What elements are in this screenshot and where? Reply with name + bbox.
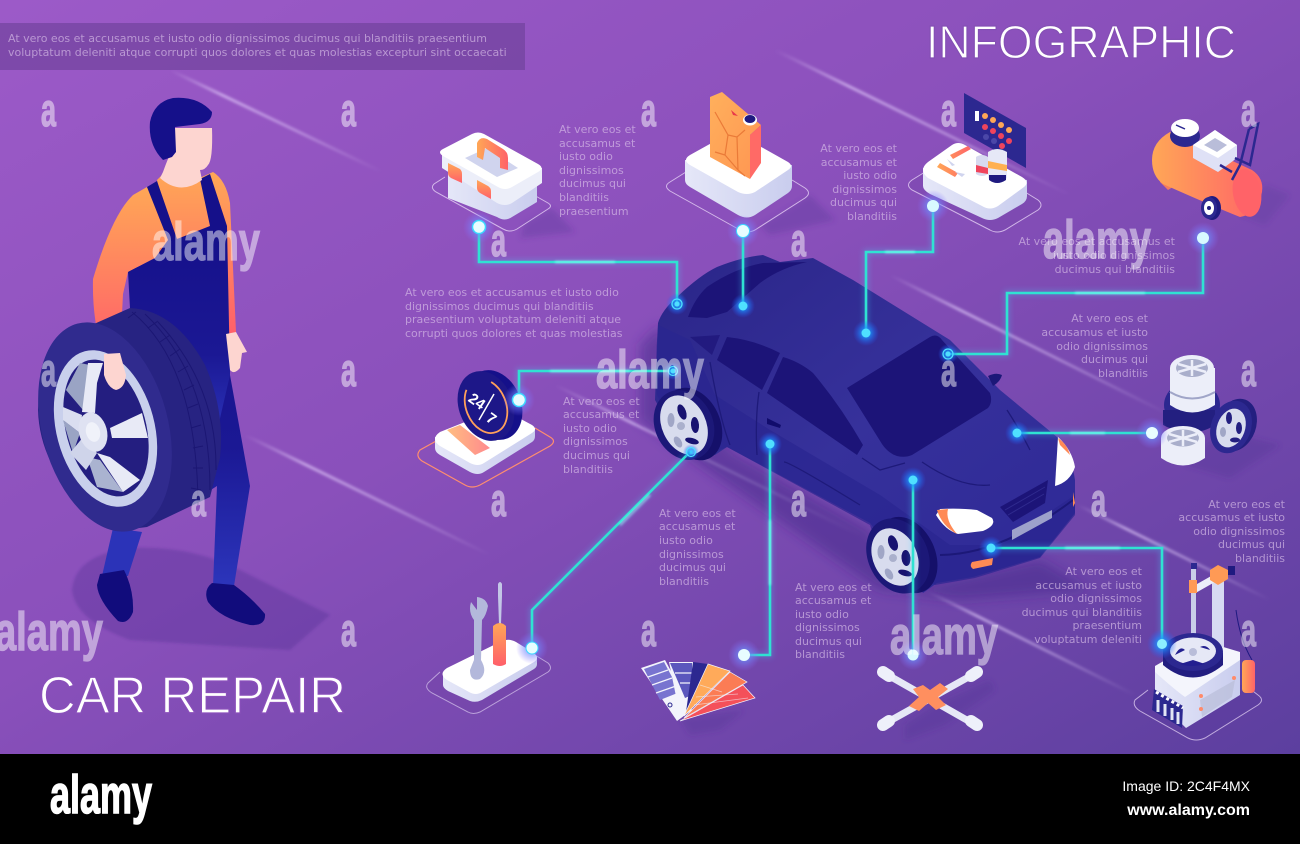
rear wheel [643, 378, 734, 470]
watermark overlay: a [1241, 604, 1256, 656]
cross wrench icon [883, 672, 995, 740]
left hand on tyre [104, 353, 126, 390]
overall straps [147, 174, 227, 300]
wheels and rims icon [1161, 355, 1280, 478]
watermark overlay: a [791, 474, 806, 526]
text: swatches: accusamus et [795, 594, 872, 607]
text: wheels: odio dignissimos [1056, 340, 1148, 353]
watermark overlay: a [41, 344, 56, 396]
legs [102, 240, 250, 586]
text: wrench: voluptatum deleniti [1034, 633, 1142, 646]
text: changer: odio dignissimos [1193, 525, 1285, 538]
text: toolbox: iusto odio [559, 150, 613, 163]
screwdriver [498, 582, 502, 624]
title: infographic: INFOGRAPHIC [926, 16, 1236, 68]
text: paint: At vero eos et [820, 142, 898, 155]
stock footer bar [0, 754, 1300, 844]
watermark overlay: a [341, 604, 356, 656]
24/7 service icon [418, 362, 554, 487]
torso and sleeves [93, 172, 236, 354]
text: tools: accusamus et [659, 520, 736, 533]
text: tools: ducimus qui [659, 561, 726, 574]
text: changer: accusamus et iusto [1178, 511, 1285, 524]
text: toolbox: ducimus qui [559, 177, 626, 190]
watermark overlay: a [1241, 84, 1256, 136]
text: wheels: At vero eos et [1071, 312, 1149, 325]
text: wrench: accusamus et iusto [1035, 579, 1142, 592]
text: wheels [1041, 312, 1149, 380]
watermark overlay: alamy [152, 212, 260, 272]
spanner and screwdriver icon [427, 582, 550, 714]
fog light [971, 558, 993, 569]
tyre changer machine icon [1134, 563, 1262, 740]
header description box [0, 23, 525, 70]
connector lines [479, 206, 1203, 655]
text: wrench: At vero eos et [1065, 565, 1143, 578]
text: wheels: blanditiis [1098, 367, 1148, 380]
text: swatches: iusto odio [795, 608, 849, 621]
door lines and handle [710, 362, 1030, 505]
text: compressor: iusto odio dignissimos [1053, 249, 1175, 262]
watermark overlay: a [641, 84, 656, 136]
connector highlight glints [550, 252, 1145, 585]
text: toolbox: praesentium [559, 205, 629, 218]
text: swatches: At vero eos et [795, 581, 872, 594]
text: tools: At vero eos et [659, 507, 736, 520]
text: paint: accusamus et [821, 156, 898, 169]
licence plate [1012, 510, 1052, 540]
jerry can icon [666, 92, 835, 235]
watermark overlay: a [941, 84, 956, 136]
toolbox icon [432, 132, 575, 238]
text: toolbox [559, 123, 636, 218]
connector nodes [463, 190, 1219, 671]
text: 24/7: ducimus qui [563, 449, 630, 462]
mechanic figure holding a tyre [16, 98, 330, 650]
text: 24/7: iusto odio [563, 422, 617, 435]
text: paint [820, 142, 898, 223]
handle plate [465, 148, 518, 177]
text: swatches: ducimus qui [795, 635, 862, 648]
watermark overlay: a [1091, 474, 1106, 526]
text: toolbox: blanditiis [559, 191, 609, 204]
rear window [688, 262, 807, 318]
text: compressor: At vero eos et accusamus et [1018, 235, 1176, 248]
text: changer [1178, 498, 1286, 565]
lower body trim [940, 500, 1073, 555]
text: compressor [1018, 235, 1176, 276]
text: paint: blanditiis [847, 210, 897, 223]
text: rear of car: praesentium voluptatum deleniti atque [405, 313, 621, 326]
wheel [1201, 196, 1221, 220]
air compressor icon [1152, 119, 1290, 225]
text: wheels: ducimus qui [1081, 353, 1148, 366]
text: 24/7: At vero eos et [563, 395, 640, 408]
text: changer: blanditiis [1235, 552, 1285, 565]
head [150, 98, 212, 188]
watermark overlay: a [341, 84, 356, 136]
diagonal light streaks [170, 50, 1270, 695]
tyre on machine [1163, 633, 1223, 678]
title: car repair: CAR REPAIR [39, 667, 346, 725]
ground shadow [72, 548, 330, 650]
watermark overlay: a [191, 474, 206, 526]
header description box: voluptatum deleniti atque corrupti quos dolores et quas molestias excepturi sint occaecati [8, 46, 507, 59]
car body [655, 255, 1075, 593]
connector: jerry can to car [742, 231, 744, 306]
text: rear of car: dignissimos ducimus qui blanditiis [405, 300, 594, 313]
side windows [690, 335, 863, 455]
text: changer: ducimus qui [1218, 538, 1285, 551]
connector: toolbox to car [479, 227, 677, 304]
text: paint: ducimus qui [830, 196, 897, 209]
watermark overlay: a [491, 214, 506, 266]
text: swatches: blanditiis [795, 648, 845, 661]
paint samples icon [908, 93, 1041, 232]
front wheel [854, 507, 949, 604]
connector: tools to rear wheel [532, 452, 690, 648]
text: wrench: odio dignissimos [1050, 592, 1142, 605]
24/7 clock: 7 [483, 410, 499, 428]
stock footer bar: alamy [50, 765, 152, 825]
trolley handle [1220, 124, 1258, 180]
text: 24/7: accusamus et [563, 408, 640, 421]
watermark overlay: alamy [1043, 210, 1151, 270]
handle [477, 138, 508, 170]
spanner [470, 597, 488, 680]
connector: changer to bumper [991, 548, 1162, 644]
text: tools [659, 507, 736, 588]
watermark overlay: a [791, 214, 806, 266]
text: swatches: dignissimos [795, 621, 860, 634]
header description box: At vero eos et accusamus et iusto odio dignissimos ducimus qui blanditiis praesentium [8, 32, 487, 45]
right hand [226, 332, 247, 372]
text: tools: blanditiis [659, 575, 709, 588]
text: 24/7: blanditiis [563, 463, 613, 476]
text: paint: dignissimos [832, 183, 897, 196]
white nodes at icons [463, 190, 1219, 671]
watermark overlay: a [941, 344, 956, 396]
text: compressor: ducimus qui blanditiis [1055, 263, 1175, 276]
windscreen [847, 336, 991, 457]
watermark overlay: alamy [890, 606, 998, 666]
text: changer: At vero eos et [1208, 498, 1286, 511]
connector: wrench to bonnet [912, 480, 914, 655]
connector: swatches to door [744, 444, 770, 655]
stock footer bar: www.alamy.com [1126, 802, 1250, 819]
connector: wheels to bonnet [1017, 432, 1152, 434]
lower box [448, 170, 537, 220]
column and arm [1189, 563, 1235, 647]
connector: paint to roof [866, 206, 933, 333]
text: swatches [795, 581, 872, 661]
tyre [16, 307, 221, 547]
text: toolbox: accusamus et [559, 137, 636, 150]
text blocks [405, 123, 1286, 661]
text: toolbox: At vero eos et [559, 123, 636, 136]
text: wrench [1022, 565, 1143, 646]
colour swatches icon [641, 660, 755, 735]
text: rear of car [405, 286, 623, 340]
24/7 clock: 24 [465, 390, 489, 414]
text: toolbox: dignissimos [559, 164, 624, 177]
watermark overlay: a [1241, 344, 1256, 396]
watermark overlay: a [341, 344, 356, 396]
text: tools: iusto odio [659, 534, 713, 547]
radiator grille [1000, 480, 1048, 522]
car shadow [640, 325, 1090, 600]
lid [442, 152, 542, 205]
watermark overlay: a [641, 604, 656, 656]
text: rear of car: corrupti quos dolores et quas molestias [405, 327, 623, 340]
latches [448, 163, 462, 183]
text: wheels: accusamus et iusto [1041, 326, 1148, 339]
text: paint: iusto odio [843, 169, 897, 182]
stock footer bar: Image ID: 2C4F4MX [1122, 778, 1251, 794]
headlights [936, 437, 1075, 534]
connector glow [479, 206, 1203, 655]
text: tools: dignissimos [659, 548, 724, 561]
pressure gauge [1170, 119, 1200, 147]
text: rear of car: At vero eos et accusamus et iusto odio [405, 286, 619, 299]
watermark overlay: a [491, 474, 506, 526]
connector: compressor to windscreen [948, 238, 1203, 354]
24/7 clock [447, 362, 533, 449]
text: wrench: praesentium [1072, 619, 1142, 632]
shoes [97, 570, 265, 625]
watermark overlay [0, 84, 1256, 666]
watermark overlay: a [41, 84, 56, 136]
text: wrench: ducimus qui blanditiis [1022, 606, 1142, 619]
car [643, 255, 1075, 604]
connector: clock to rear [519, 371, 673, 400]
overall bib [128, 226, 230, 440]
text: 24/7: dignissimos [563, 435, 628, 448]
text: 24/7 [563, 395, 640, 476]
mirror [988, 374, 1002, 386]
blue nodes on car [664, 293, 1029, 560]
watermark overlay: alamy [596, 340, 704, 400]
